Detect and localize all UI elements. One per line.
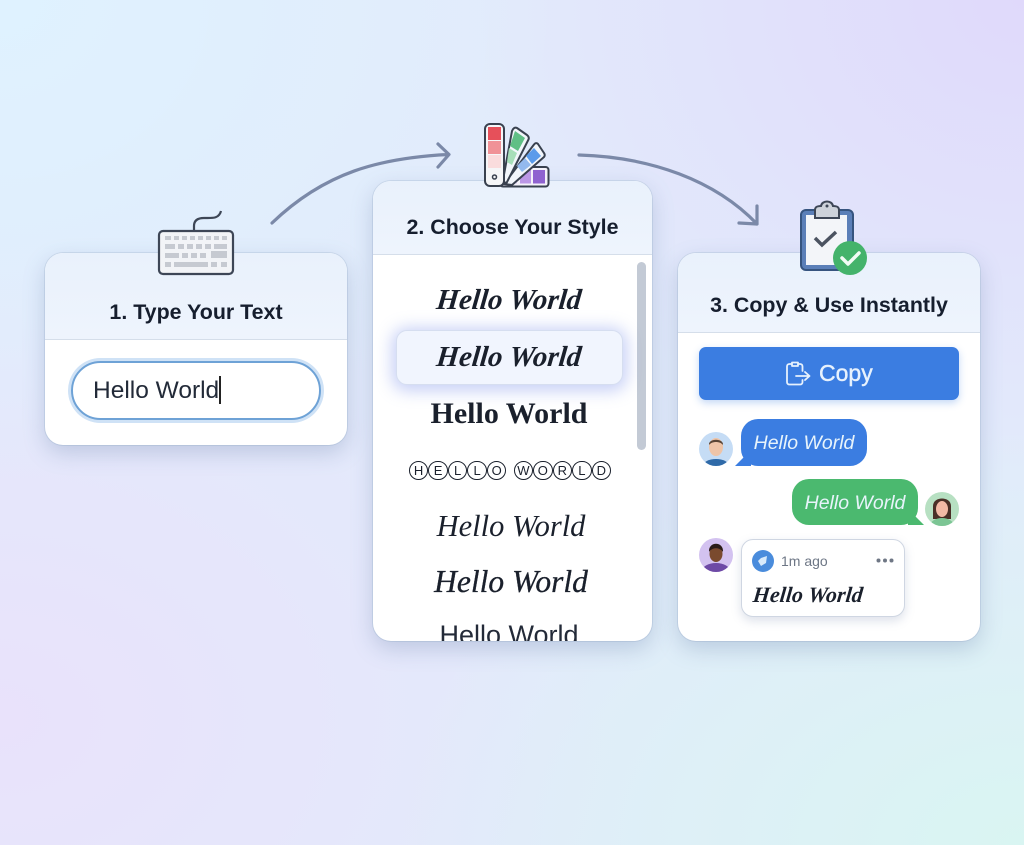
post text: Hello World (752, 582, 864, 607)
heading: step 3: 3. Copy & Use Instantly (710, 293, 948, 317)
heading: step 1 (45, 253, 347, 340)
bubble body (792, 479, 918, 525)
heading: step 1: 1. Type Your Text (109, 300, 283, 324)
style option: circled letters: W (517, 463, 530, 478)
post time: 1m ago (781, 553, 828, 569)
style option: circled letters: O (492, 463, 502, 478)
bubble tail (908, 516, 924, 525)
scrollbar (637, 262, 646, 450)
heading: step 2 (373, 181, 652, 255)
text input (71, 361, 321, 420)
icon: colour swatch fan (484, 123, 550, 188)
arrow: type to style (270, 142, 451, 225)
style option: circled letters: L (474, 463, 481, 478)
style option: calligraphy: Hello World (437, 509, 585, 543)
heading: step 3 (678, 253, 980, 333)
bubble body: Hello World (754, 432, 854, 454)
style option: circled letters: L (578, 463, 585, 478)
more menu dots (876, 558, 894, 562)
panel: choose your style (373, 181, 652, 641)
chat bubble: green (792, 479, 924, 525)
text input: Hello World (93, 377, 219, 404)
bubble tail (735, 458, 751, 466)
button label: Copy (819, 360, 873, 386)
copy button (699, 347, 959, 400)
bubble body: Hello World (805, 492, 905, 514)
style option: circled letters: D (597, 463, 606, 478)
icon: keyboard (158, 210, 234, 276)
bubble body (741, 419, 867, 466)
style option: circled letters: H (414, 463, 423, 478)
selected style highlight (396, 330, 623, 385)
style option: bold serif: Hello World (431, 397, 587, 430)
style option: script selected: Hello World (435, 341, 583, 373)
icon: clipboard export (786, 362, 810, 386)
style option: circled letters: L (454, 463, 461, 478)
style option: circled letters: R (558, 463, 567, 478)
style option: circled letters: E (434, 463, 442, 478)
icon: clipboard with check (800, 200, 867, 275)
heading: step 2: 2. Choose Your Style (406, 215, 618, 239)
avatar: woman (925, 492, 959, 526)
panel: copy and use instantly (678, 253, 980, 641)
icon: social bird badge (752, 550, 774, 572)
avatar: man (699, 432, 733, 466)
social post card (741, 539, 905, 617)
style option: circled letters (409, 461, 611, 480)
chat bubble: blue (735, 419, 867, 466)
style option: script: Hello World (435, 284, 583, 316)
style option: circled letters: O (538, 463, 548, 478)
arrow: style to copy (577, 153, 759, 226)
panel: type your text (45, 253, 347, 445)
style option: calligraphy heavier: Hello World (434, 564, 588, 599)
avatar: dark-skinned person (699, 538, 733, 572)
